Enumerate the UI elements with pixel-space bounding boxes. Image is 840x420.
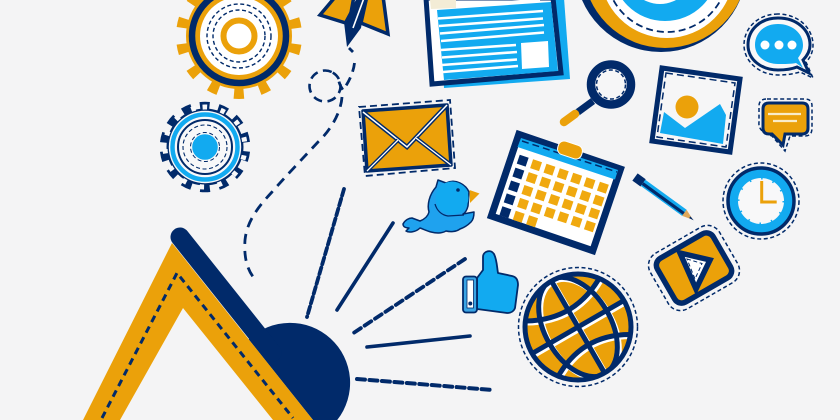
icon: bird <box>403 180 480 233</box>
icon: calendar <box>491 134 620 251</box>
icon: picture frame <box>652 68 740 152</box>
icon: large target circle <box>575 0 747 52</box>
icon: thumbs up <box>463 251 518 313</box>
icon: paper plane <box>320 0 388 47</box>
icon: magnifying glass <box>564 64 631 122</box>
icon: orange comment bubble <box>759 99 812 151</box>
icon: newspaper <box>426 0 570 88</box>
orange triangle frame <box>83 243 313 420</box>
navy semicircle and bar <box>180 237 350 420</box>
icon: clock <box>723 163 799 239</box>
icon: video tile <box>643 220 745 316</box>
icon: chat bubble with dots <box>744 14 813 78</box>
arrow: plane dashed flight path <box>245 48 354 278</box>
icon: envelope <box>359 100 455 176</box>
burst rays <box>307 189 493 390</box>
icon: pencil <box>632 173 697 224</box>
icon: globe <box>518 266 638 388</box>
icon: orange gear <box>175 0 303 100</box>
icon: blue gear <box>159 101 251 193</box>
